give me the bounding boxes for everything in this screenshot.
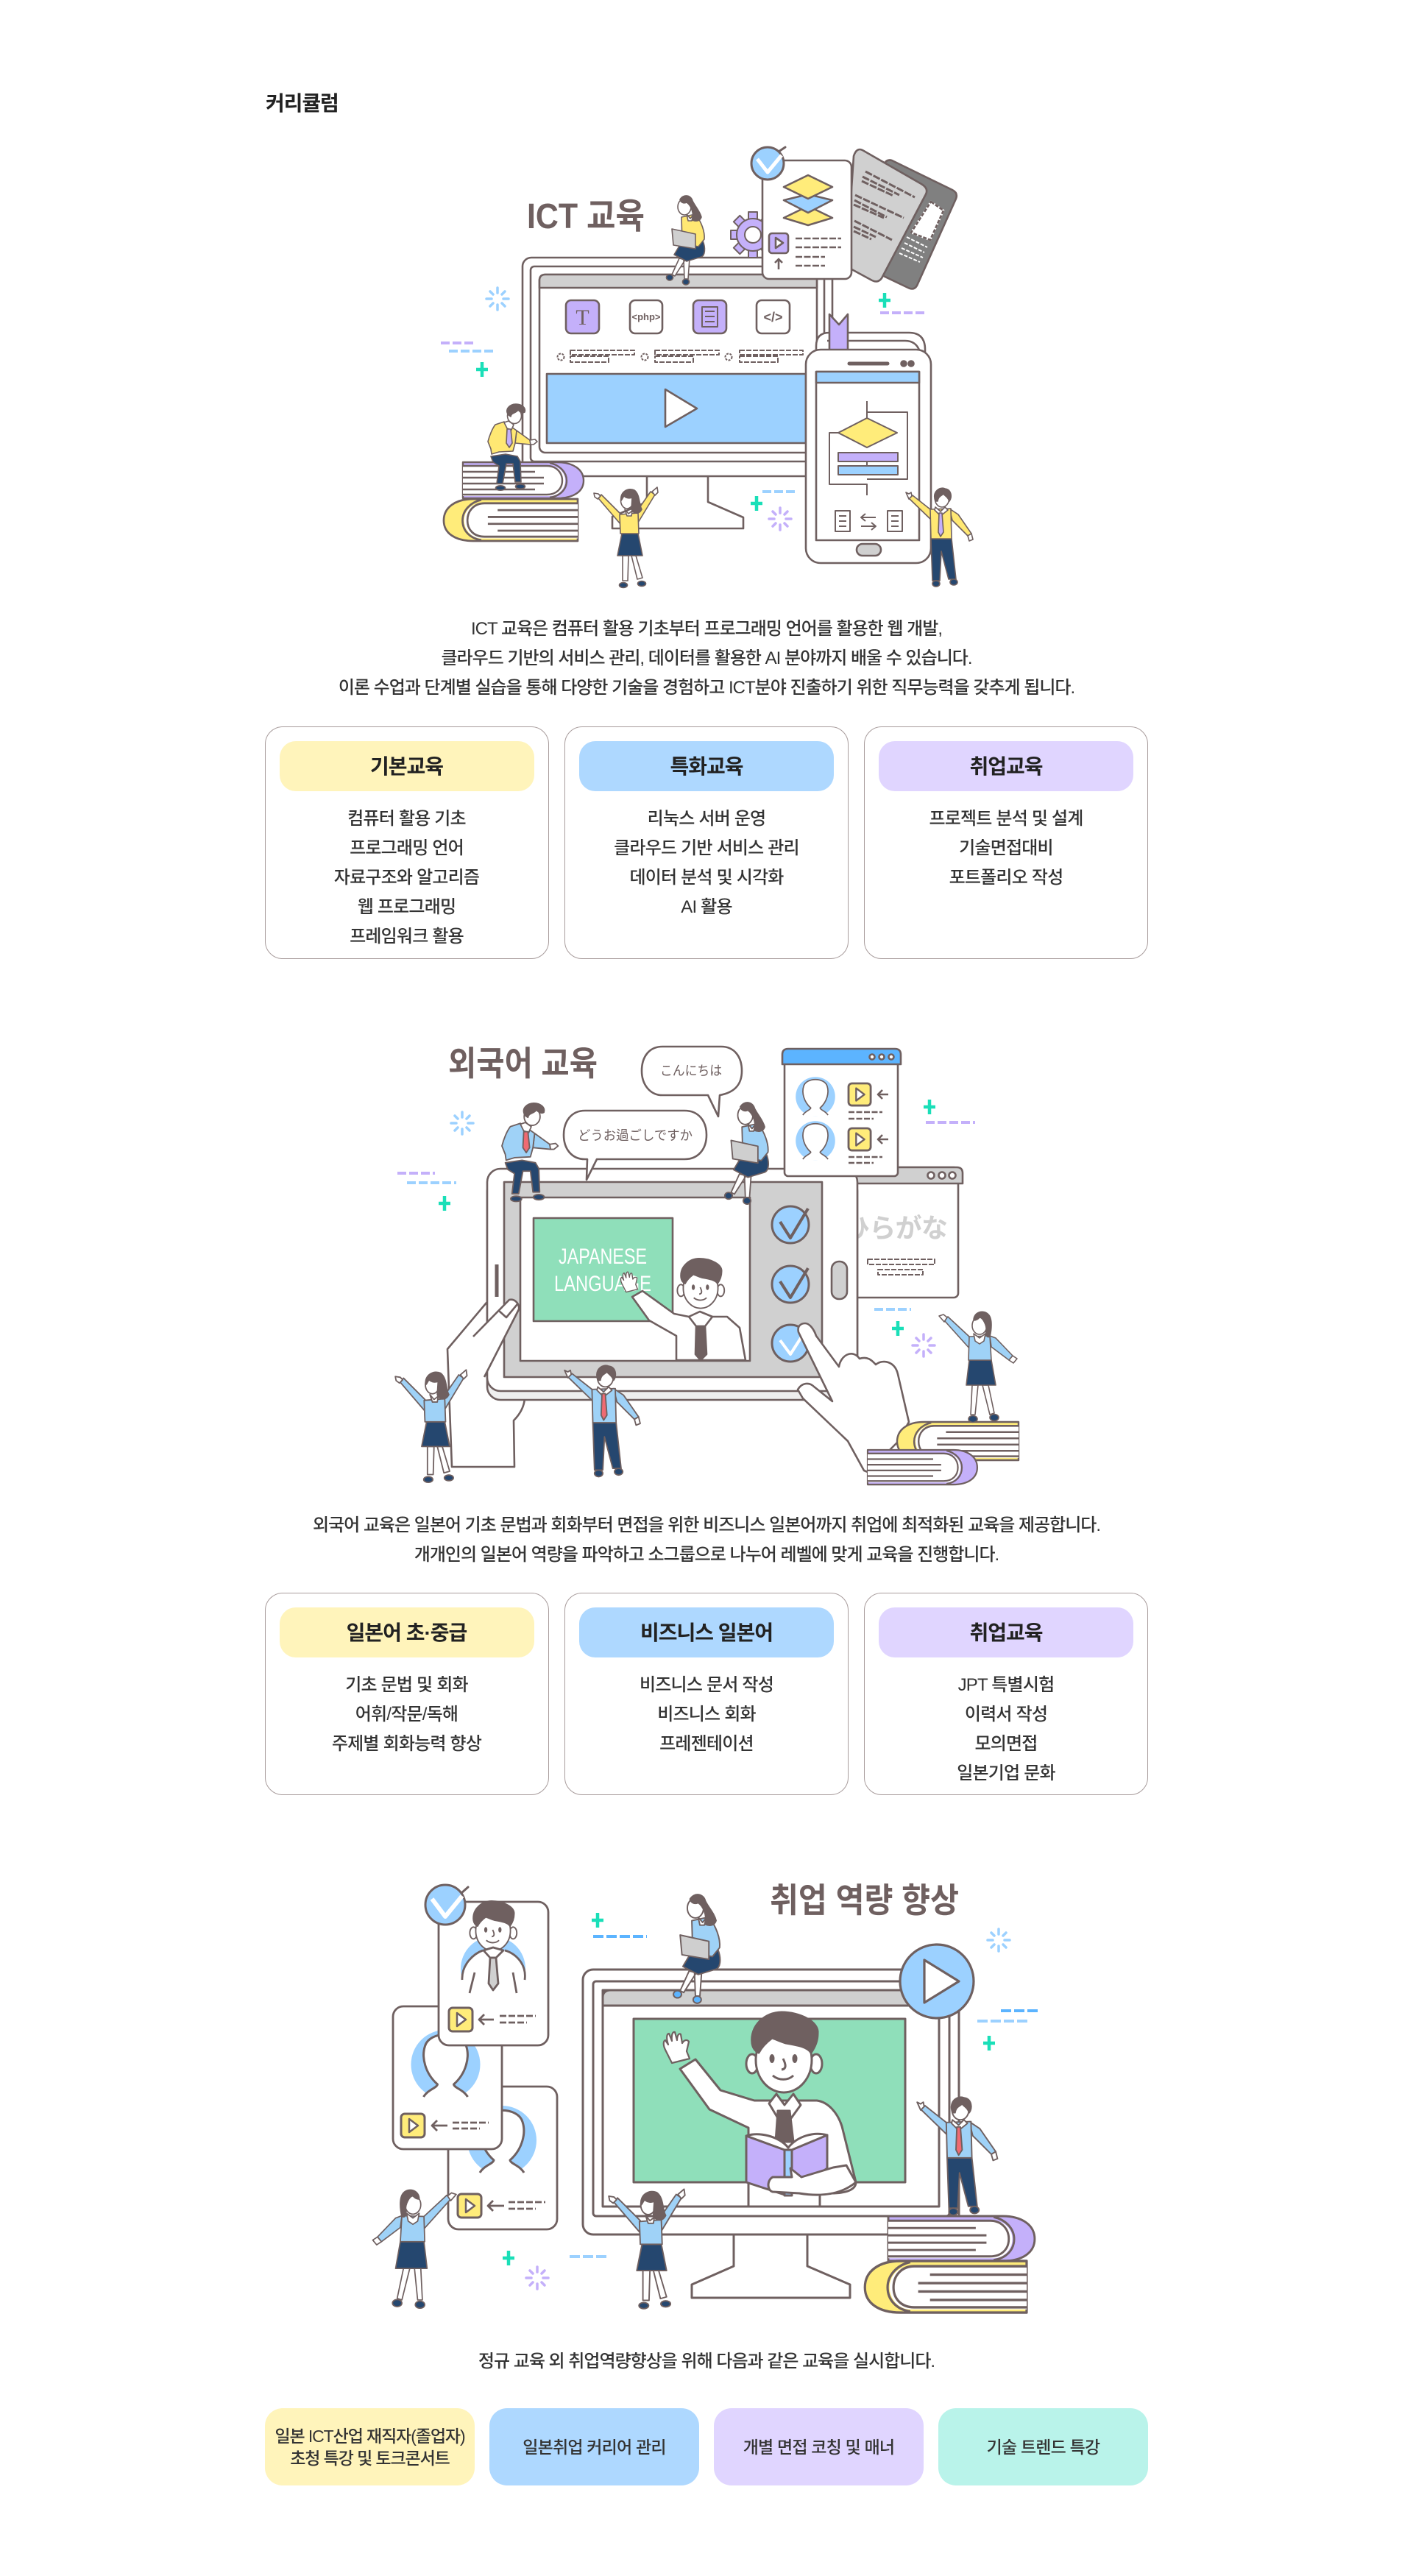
video player [547,374,806,443]
floating lesson card [762,160,851,279]
panel heading [579,741,834,791]
panel list: 주제별 회화능력 향상 [332,1734,481,1754]
intro: foreign language [313,1515,1100,1565]
girl arms raised [594,487,658,587]
left palm [447,1303,525,1467]
code tile: php [630,300,662,333]
title: 커리큘럼 [266,92,339,115]
tile: career management [489,2408,699,2485]
boy standing center [564,1365,640,1476]
panel list: 프레임워크 활용 [350,927,464,946]
tile: tech trends [938,2408,1148,2485]
panel list: 자료구조와 알고리즘 [334,868,479,888]
books [865,2216,1035,2313]
panel list [614,809,799,917]
decoration top [592,1913,1041,2050]
panel: business Japanese [564,1593,849,1795]
tile: special lecture [265,2408,475,2485]
girl with laptop on monitor [673,1894,720,2003]
intro: ICT: ICT 교육은 컴퓨터 활용 기초부터 프로그래밍 언어를 활용한 웹 개발, [471,619,942,639]
tile: interview coaching [714,2408,924,2485]
check badge [425,1885,468,1925]
panel list: 비즈니스 문서 작성 [640,1675,773,1695]
video list window [782,1049,901,1176]
profile card middle [393,2006,502,2149]
panel heading [280,1607,534,1657]
panel list [334,809,479,946]
placeholder text rows [558,350,803,362]
girl on books [939,1312,1017,1422]
panel: employment education [864,726,1148,959]
tile: tech trends: 기술 트렌드 특강 [987,2438,1099,2457]
speech bubble: how are you [564,1111,706,1180]
books with boy [444,404,584,541]
girl arms raised center [609,2189,685,2309]
panel list: 이력서 작성 [965,1705,1047,1724]
panel heading: 일본어 초·중급 [347,1621,467,1644]
boy sitting on tablet [502,1103,558,1201]
grey light card [846,149,927,281]
girl with laptop on tablet [725,1103,768,1204]
decoration bottom [503,2251,609,2289]
code tile: document [693,300,726,333]
tile: career management: 일본취업 커리어 관리 [523,2438,666,2457]
panel list: 클라우드 기반 서비스 관리 [614,838,799,858]
speech bubble: how are you: どうお過ごしですか [578,1125,693,1144]
girl arms raised left [395,1370,467,1482]
panel list: 기술면접대비 [959,838,1053,858]
panel list: AI 활용 [681,897,732,917]
tile: interview coaching: 개별 면접 코칭 및 매너 [743,2438,894,2457]
intro: ICT: 이론 수업과 단계별 실습을 통해 다양한 기술을 경험하고 ICT분야 진출하기 위한 직무능력을 갖추게 됩니다. [339,678,1074,698]
green board: LANGUAGE [554,1272,651,1296]
panel heading: 비즈니스 일본어 [640,1621,773,1644]
panel list: 리눅스 서버 운영 [648,809,765,829]
intro: ICT: 클라우드 기반의 서비스 관리, 데이터를 활용한 AI 분야까지 배울 수 있습니다. [441,648,972,668]
panel: Japanese beginner [265,1593,549,1795]
window behind: hiragana [832,1167,963,1298]
books [868,1422,1019,1485]
heading: Foreign language education: 외국어 교육 [448,1044,598,1083]
panel list: 데이터 분석 및 시각화 [629,868,784,888]
panel heading [280,741,534,791]
panel heading: 기본교육 [370,755,443,778]
decoration left [397,1112,473,1211]
panel: specialised education [564,726,849,959]
code tile: T [566,300,599,333]
smartphone [806,314,931,563]
boy standing on books [917,2097,997,2215]
intro: foreign language: 외국어 교육은 일본어 기초 문법과 회화부터 면접을 위한 비즈니스 일본어까지 취업에 최적화된 교육을 제공합니다. [313,1515,1100,1535]
panel heading: 취업교육 [969,1621,1043,1644]
flowchart [829,401,907,495]
panel list: 어휘/작문/독해 [355,1705,458,1724]
intro: foreign language: 개개인의 일본어 역량을 파악하고 소그룹으로 나누어 레벨에 맞게 교육을 진행합니다. [414,1545,999,1565]
intro: ICT [339,619,1074,698]
girl with laptop [667,196,704,285]
left thumb [471,1300,519,1377]
window behind: hiragana: ひらがな [843,1207,948,1245]
panel heading [579,1607,834,1657]
panel list: 비즈니스 회화 [657,1705,756,1724]
panel list: 프로그래밍 언어 [350,838,464,858]
intro: employment: 정규 교육 외 취업역량향상을 위해 다음과 같은 교육을 실시합니다. [478,2352,935,2371]
panel list [332,1675,481,1754]
code tile: php: <php> [631,311,661,322]
code tile: T: T [576,305,589,330]
tile: special lecture: 일본 ICT산업 재직자(졸업자) [275,2426,465,2445]
gear [731,212,776,258]
panel list [957,1675,1055,1783]
code tile: code tag: </> [763,310,783,325]
sync icons [835,511,902,531]
decoration right [751,293,924,530]
panel heading: 취업교육 [969,755,1043,778]
decoration right [874,1100,975,1356]
panel list: 프레젠테이션 [659,1734,754,1754]
panel list: 프로젝트 분석 및 설계 [929,809,1083,829]
girl pointing left [373,2190,456,2308]
panel list: 웹 프로그래밍 [358,897,456,917]
panel list [929,809,1083,888]
panel list: 포트폴리오 작성 [949,868,1063,888]
panel heading [879,1607,1133,1657]
illustration: ICT education [441,147,973,587]
profile card front [439,1901,548,2045]
grey dark card [876,160,957,289]
monitor [583,1970,959,2298]
code tile: code tag [757,300,790,333]
teacher with book [664,2012,856,2207]
panel heading [879,741,1133,791]
boy standing right [906,488,973,587]
tile: special lecture: 초청 특강 및 토크콘서트 [290,2448,450,2467]
panel list: 일본기업 문화 [957,1763,1055,1783]
heading: Employment capability: 취업 역량 향상 [770,1881,959,1919]
teacher [620,1259,746,1360]
play button [900,1945,974,2018]
panel list: JPT 특별시험 [958,1675,1054,1695]
profile card back [448,2087,557,2229]
check buttons [772,1206,809,1362]
right hand [798,1323,909,1472]
tablet [487,1169,857,1400]
panel list [640,1675,773,1754]
panel list: 컴퓨터 활용 기초 [347,809,466,829]
check badge [751,147,785,180]
green board [534,1218,673,1321]
panel: basic education [265,726,549,959]
panel list: 기초 문법 및 회화 [345,1675,468,1695]
illustration: Employment capability [373,1881,1041,2313]
decoration left [441,288,509,377]
panel: employment education 2 [864,1593,1148,1795]
illustration: Foreign language education [395,1044,1019,1485]
monitor [523,258,832,528]
speech bubble: konnichiwa [642,1047,742,1117]
panel heading: 특화교육 [670,755,743,778]
panel list: 모의면접 [974,1734,1038,1754]
heading: ICT education: ICT 교육 [527,197,645,236]
speech bubble: konnichiwa: こんにちは [660,1061,722,1080]
green board: JAPANESE [559,1245,647,1269]
